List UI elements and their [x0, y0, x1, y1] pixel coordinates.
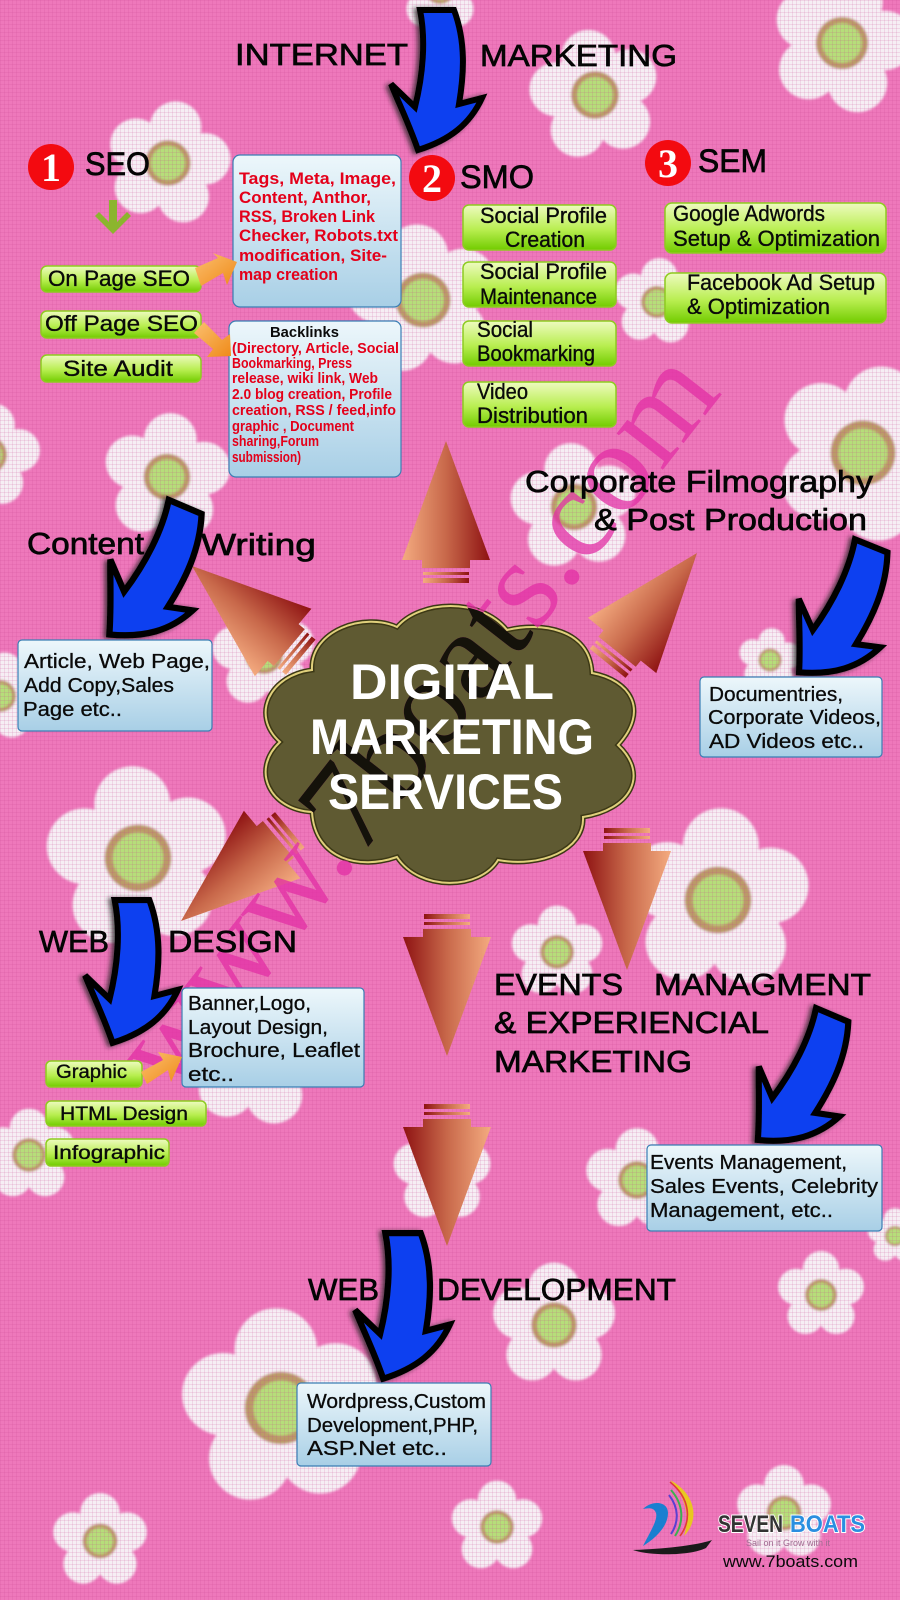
blue arrow: web design: [85, 900, 178, 1043]
panel: on page details: [233, 155, 401, 307]
pill: graphic: [46, 1061, 142, 1087]
SEO heading with number badge: [28, 144, 150, 190]
cloud title: SERVICES: [328, 764, 563, 820]
heading: events management: MARKETING: [494, 1044, 692, 1079]
SEO heading with number badge: 1: [41, 145, 61, 190]
pill: infographic: [46, 1139, 169, 1166]
panel: web design details: Layout Design,: [188, 1017, 328, 1039]
panel: backlinks details: graphic , Document: [232, 419, 354, 435]
pill: google adwords: Google Adwords: [673, 201, 825, 226]
heading: events management: EVENTS: [494, 967, 623, 1002]
panel: filmography details: Corporate Videos,: [708, 707, 881, 729]
logo: seven boats: Sail on it Grow with it: [746, 1538, 830, 1548]
pill: off page SEO: Off Page SEO: [45, 311, 198, 336]
pill: social profile maintenance: Maintenance: [480, 284, 597, 309]
panel: filmography details: AD Videos etc..: [709, 731, 864, 753]
panel: backlinks details: Backlinks: [270, 324, 339, 341]
pill: social bookmarking: Social: [477, 317, 533, 342]
heading: web design: WEB: [39, 924, 109, 959]
cloud title: MARKETING: [310, 709, 594, 765]
heading: events management: MANAGMENT: [654, 967, 871, 1002]
pill: HTML design: HTML Design: [60, 1104, 188, 1125]
pill: on page SEO: On Page SEO: [48, 266, 190, 291]
heading: content writing: Content: [27, 526, 144, 561]
orange arrow: on page to details: [195, 253, 237, 286]
blue arrow: web development: [355, 1233, 450, 1379]
SMO heading with number badge: 2: [422, 156, 442, 201]
copper arrow: to events: [583, 828, 671, 970]
pill: social bookmarking: Bookmarking: [477, 341, 595, 366]
panel: content details: [18, 640, 212, 731]
panel: on page details: Content, Anthor,: [239, 188, 371, 207]
copper arrow: up to SEO/SMO/SEM: [402, 441, 490, 583]
blue arrow: events: [732, 996, 875, 1166]
central cloud badge: [266, 606, 634, 883]
copper arrow: down centre: [403, 914, 491, 1056]
SEM heading with number badge: [645, 140, 767, 186]
pill: social profile creation: Social Profile: [480, 203, 607, 228]
panel: events details: [647, 1145, 882, 1231]
blue arrow: internet marketing: [391, 10, 482, 150]
panel: web development details: Development,PHP,: [307, 1415, 478, 1437]
panel: events details: Sales Events, Celebrity: [650, 1176, 878, 1198]
pill: social profile maintenance: Social Profile: [480, 259, 607, 284]
heading: corporate filmography: Corporate Filmography: [525, 464, 874, 499]
logo: seven boats: www.7boats.com: [722, 1552, 858, 1571]
pill: HTML design: [46, 1101, 206, 1126]
panel: content details: Article, Web Page,: [24, 651, 210, 673]
pill: graphic: Graphic: [56, 1062, 127, 1083]
panel: events details: Events Management,: [650, 1152, 847, 1174]
pill: video distribution: Distribution: [477, 403, 588, 428]
pill: video distribution: [463, 379, 616, 428]
pill: video distribution: Video: [477, 379, 528, 404]
pill: social bookmarking: [463, 317, 616, 366]
panel: on page details: modification, Site-: [239, 246, 387, 265]
heading: web development: [308, 1272, 676, 1307]
logo: seven boats: [633, 1480, 865, 1571]
panel: on page details: map creation: [239, 265, 338, 284]
SMO heading with number badge: [409, 155, 534, 201]
orange arrow: off page to backlinks: [194, 322, 231, 357]
SEM heading with number badge: 3: [658, 141, 678, 186]
copper arrow: to filmography: [573, 525, 731, 691]
orange arrow: graphic to details: [141, 1052, 182, 1084]
heading: web development: DEVELOPMENT: [437, 1272, 676, 1307]
panel: backlinks details: Bookmarking, Press: [232, 356, 352, 372]
heading: corporate filmography: & Post Production: [594, 502, 867, 537]
pill: google adwords: [665, 201, 886, 253]
heading: internet marketing: INTERNET: [235, 37, 408, 72]
pill: facebook ad: [665, 270, 886, 323]
panel: backlinks details: sharing,Forum: [232, 434, 319, 450]
panel: web design details: [182, 988, 364, 1087]
watermark: www.7boats.com: [82, 323, 745, 1115]
SEM heading with number badge: SEM: [698, 143, 767, 179]
panel: on page details: Checker, Robots.txt: [239, 226, 398, 245]
panel: web design details: Banner,Logo,: [188, 993, 311, 1015]
cloud title: DIGITAL: [350, 654, 554, 710]
pill: site audit: [41, 355, 201, 382]
panel: backlinks details: 2.0 blog creation, Profile: [232, 387, 392, 403]
pill: social profile creation: Creation: [505, 227, 585, 252]
pill: site audit: Site Audit: [63, 356, 173, 381]
heading: content writing: Writing: [201, 527, 316, 562]
heading: events management: [494, 967, 871, 1079]
copper arrow: to web development: [403, 1104, 491, 1246]
cloud title: [310, 654, 594, 820]
panel: filmography details: [700, 677, 882, 757]
heading: corporate filmography: [525, 464, 874, 537]
heading: internet marketing: MARKETING: [480, 38, 677, 73]
heading: web design: [39, 924, 297, 959]
logo: seven boats: BOATS: [790, 1511, 865, 1538]
logo: seven boats: SEVEN: [718, 1511, 783, 1538]
pill: facebook ad: Facebook Ad Setup: [687, 270, 875, 295]
blue arrow: content writing: [83, 488, 229, 661]
panel: content details: Add Copy,Sales: [24, 675, 174, 697]
copper arrow: to web design: [153, 796, 318, 955]
panel: content details: Page etc..: [23, 699, 122, 721]
icon: green down arrow: [95, 200, 131, 234]
panel: events details: Management, etc..: [650, 1200, 833, 1222]
blue arrow: filmography: [773, 528, 900, 697]
heading: content writing: [27, 526, 316, 562]
panel: backlinks details: submission): [232, 450, 301, 466]
panel: web development details: Wordpress,Custom: [307, 1391, 486, 1413]
panel: web development details: [297, 1383, 491, 1466]
pill: social profile maintenance: [463, 259, 616, 309]
heading: web development: WEB: [308, 1272, 379, 1307]
watermark: www.7boats.com: [82, 323, 745, 1115]
pill: facebook ad: & Optimization: [687, 294, 830, 319]
panel: backlinks details: creation, RSS / feed,info: [232, 403, 396, 419]
heading: internet marketing: [235, 37, 677, 73]
panel: web design details: Brochure, Leaflet: [188, 1040, 360, 1062]
heading: web design: DESIGN: [168, 924, 297, 959]
pill: google adwords: Setup & Optimization: [673, 226, 880, 251]
SMO heading with number badge: SMO: [460, 159, 534, 195]
panel: backlinks details: [229, 321, 401, 477]
copper arrow: to content writing: [164, 532, 329, 691]
heading: events management: & EXPERIENCIAL: [494, 1005, 769, 1040]
pill: infographic: Infographic: [53, 1143, 165, 1164]
panel: filmography details: Documentries,: [709, 684, 843, 706]
pill: social profile creation: [463, 203, 616, 252]
panel: on page details: RSS, Broken Link: [239, 207, 376, 226]
panel: backlinks details: release, wiki link, Web: [232, 371, 378, 387]
SEO heading with number badge: SEO: [85, 146, 150, 182]
panel: backlinks details: (Directory, Article, Social: [232, 341, 399, 357]
panel: web design details: etc..: [188, 1064, 234, 1086]
panel: on page details: Tags, Meta, Image,: [239, 169, 396, 188]
panel: web development details: ASP.Net etc..: [307, 1438, 447, 1460]
